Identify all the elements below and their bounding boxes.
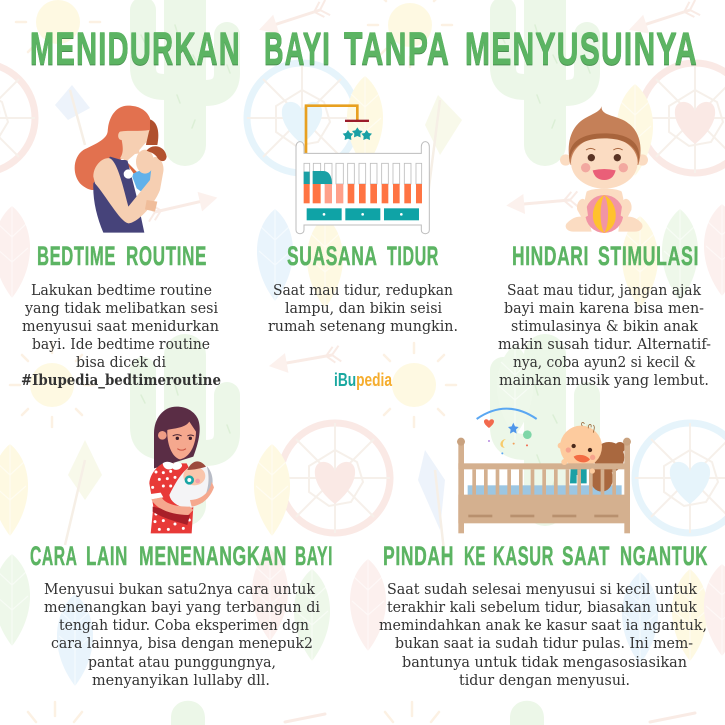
heading: bedtime routine: BEDTIME <box>37 241 116 271</box>
heading: pindah ke kasur saat ngantuk: KE <box>464 541 486 571</box>
text: suasana tidur: lampu, dan bikin seisi <box>285 299 442 317</box>
text: pindah ke kasur saat ngantuk: bantunya untuk tidak mengasosiasikan <box>402 653 687 671</box>
text: hindari stimulasi: nya, coba ayun2 si kecil & <box>513 353 696 371</box>
text: cara lain menenangkan bayi: cara lainnya, bisa dengan menepuk2 <box>51 634 313 652</box>
text: bedtime routine: menyusui saat menidurkan <box>22 317 219 335</box>
text: cara lain menenangkan bayi <box>44 580 320 689</box>
text: hindari stimulasi: mainkan musik yang lembut. <box>499 371 709 389</box>
illustration: mother kissing baby <box>75 106 167 233</box>
text: bedtime routine: Lakukan bedtime routine <box>31 281 212 299</box>
illustration: baby with ball <box>560 106 648 233</box>
text: pindah ke kasur saat ngantuk: Saat sudah selesai menyusui si kecil untuk <box>387 580 698 598</box>
heading: pindah ke kasur saat ngantuk: KASUR <box>493 541 554 571</box>
heading: bedtime routine: ROUTINE <box>126 241 207 271</box>
title: BAYI <box>264 23 331 74</box>
text: suasana tidur: rumah setenang mungkin. <box>268 317 458 335</box>
text: hindari stimulasi: Saat mau tidur, jangan ajak <box>507 281 702 299</box>
heading: cara lain menenangkan bayi: CARA <box>30 541 77 571</box>
text: cara lain menenangkan bayi: menyanyikan lullaby dll. <box>92 671 270 689</box>
heading: pindah ke kasur saat ngantuk: PINDAH <box>383 541 454 571</box>
text: pindah ke kasur saat ngantuk <box>379 580 707 689</box>
heading: hindari stimulasi: HINDARI <box>512 241 589 271</box>
heading: cara lain menenangkan bayi: LAIN <box>86 541 128 571</box>
text: suasana tidur <box>268 281 458 335</box>
text: bedtime routine <box>21 281 221 389</box>
logo: iBupedia <box>334 370 393 390</box>
text: bedtime routine: bisa dicek di <box>76 353 166 371</box>
text: cara lain menenangkan bayi: menenangkan bayi yang terbangun di <box>44 598 320 616</box>
text: cara lain menenangkan bayi: pantat atau punggungnya, <box>88 653 276 671</box>
text: suasana tidur: Saat mau tidur, redupkan <box>273 281 453 299</box>
text: hindari stimulasi: makin susah tidur. Alternatif- <box>498 335 711 353</box>
text: hindari stimulasi: bayi main karena bisa men- <box>504 299 704 317</box>
text: pindah ke kasur saat ngantuk: terakhir kali sebelum tidur, biasakan untuk <box>387 598 698 616</box>
text: bedtime routine: #Ibupedia_bedtimeroutine <box>21 371 221 389</box>
illustration: crib with mobile <box>296 106 429 234</box>
text: bedtime routine: yang tidak melibatkan sesi <box>24 299 218 317</box>
illustration: baby standing in crib with bear <box>457 409 631 533</box>
text: cara lain menenangkan bayi: tengah tidur. Coba eksperimen dgn <box>59 616 309 634</box>
heading: suasana tidur: TIDUR <box>387 241 439 271</box>
text: pindah ke kasur saat ngantuk: bukan saat ia sudah tidur pulas. Ini mem- <box>395 634 693 652</box>
heading: cara lain menenangkan bayi: BAYI <box>295 541 333 571</box>
text: cara lain menenangkan bayi: Menyusui bukan satu2nya cara untuk <box>44 580 316 598</box>
title: MENIDURKAN <box>30 23 241 74</box>
heading: cara lain menenangkan bayi: MENENANGKAN <box>139 541 287 571</box>
text: pindah ke kasur saat ngantuk: tidur dengan menyusui. <box>459 671 630 689</box>
heading: suasana tidur: SUASANA <box>287 241 377 271</box>
text: hindari stimulasi: stimulasinya & bikin anak <box>511 317 699 335</box>
heading: pindah ke kasur saat ngantuk: SAAT <box>562 541 610 571</box>
text: bedtime routine: bayi. Ide bedtime routine <box>32 335 210 353</box>
illustration: mother holding swaddled baby <box>149 407 214 533</box>
text: hindari stimulasi <box>498 281 711 389</box>
text: pindah ke kasur saat ngantuk: memindahkan anak ke kasur saat ia ngantuk, <box>379 616 707 634</box>
title: TANPA <box>344 23 449 74</box>
